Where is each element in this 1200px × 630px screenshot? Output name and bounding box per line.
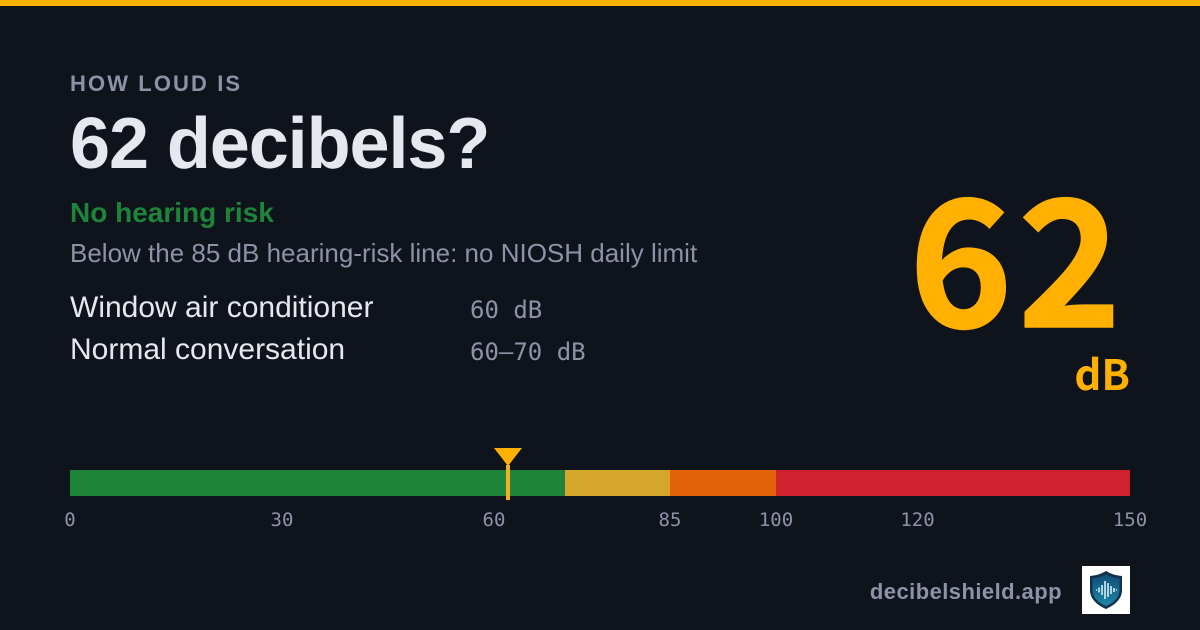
- tick 150: 150: [1113, 509, 1147, 531]
- decibel scale bar: [70, 470, 1130, 496]
- title: 62 decibels?: [70, 104, 489, 184]
- level marker: [494, 448, 522, 500]
- tick 30: 30: [271, 509, 293, 531]
- risk status: No hearing risk: [70, 197, 274, 228]
- tick 60: 60: [483, 509, 505, 531]
- tick 0: 0: [64, 509, 76, 531]
- comparison 2 value: 60–70 dB: [470, 338, 586, 366]
- comparison 2 name: Normal conversation: [70, 333, 345, 366]
- eyebrow heading: HOW LOUD IS: [70, 71, 242, 96]
- tick 85: 85: [659, 509, 681, 531]
- icon: shield logo: [1082, 566, 1130, 614]
- safe segment: [70, 470, 565, 496]
- dB unit: dB: [1074, 342, 1130, 403]
- tick 120: 120: [900, 509, 935, 531]
- comparison 1 name: Window air conditioner: [70, 291, 373, 324]
- site name: decibelshield.app: [870, 579, 1062, 604]
- risk description: Below the 85 dB hearing-risk line: no NIOSH daily limit: [70, 238, 697, 268]
- tick 100: 100: [759, 509, 793, 531]
- danger segment: [776, 470, 1130, 496]
- comparison list: [70, 291, 586, 366]
- warning segment: [670, 470, 776, 496]
- comparison 1 value: 60 dB: [470, 296, 542, 324]
- top accent bar: [0, 0, 1200, 6]
- big decibel number: 62: [909, 123, 1126, 378]
- caution segment: [565, 470, 670, 496]
